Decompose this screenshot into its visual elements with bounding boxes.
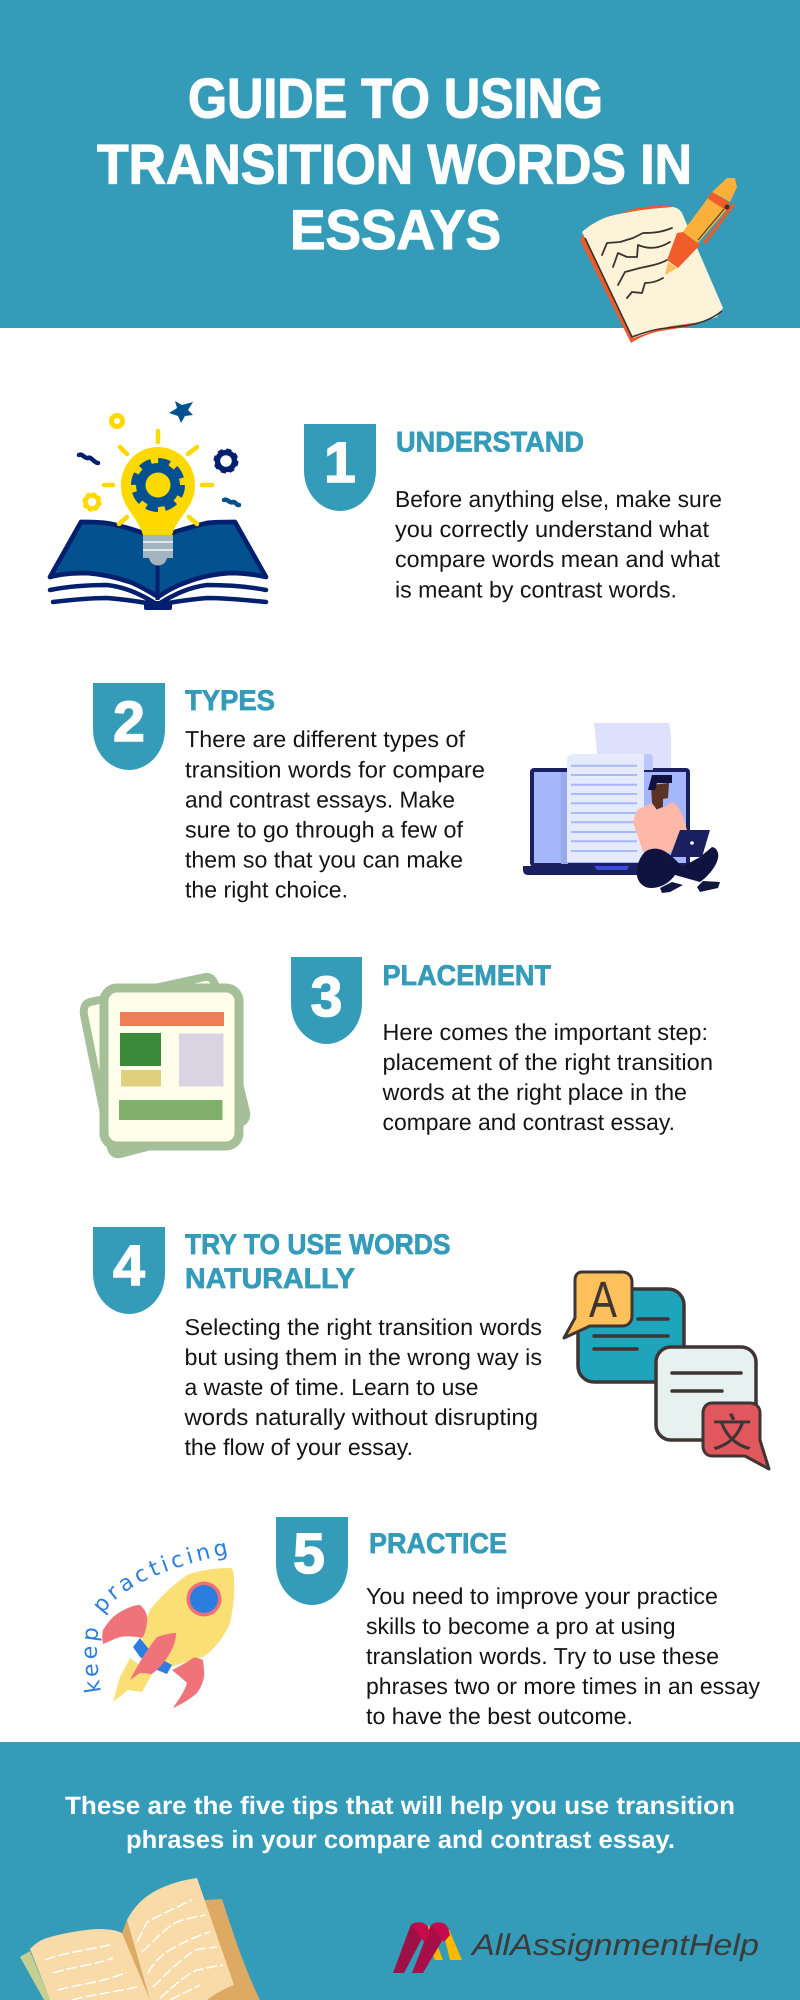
letter A: A [589,1271,617,1328]
step 5 body: You need to improve your practice [366,1583,718,1609]
step 1 body [395,486,722,602]
step 1 badge [304,424,376,511]
step 3 heading: PLACEMENT [382,960,552,992]
step 3 body: Here comes the important step: [382,1019,708,1045]
step 3 body: words at the right place in the [381,1079,687,1105]
step 4 body: Selecting the right transition words [184,1314,542,1340]
step 2 body: and contrast essays. Make [185,786,455,812]
step 1 heading: UNDERSTAND [396,426,584,458]
rocket caption: keep practicing [84,1542,227,1692]
footer text [65,1792,735,1854]
step 4 body: but using them in the wrong way is [184,1344,542,1370]
letter wen: 文 [712,1401,752,1459]
step 4 badge [93,1227,165,1314]
step 3 body: compare and contrast essay. [382,1109,675,1135]
title: TRANSITION WORDS IN [97,132,692,196]
step 2 icon: person with laptop [523,723,720,893]
step 5 badge [276,1517,348,1605]
step 4 heading: TRY TO USE WORDS [185,1229,450,1261]
icon: open book [20,1878,260,2000]
step 3 badge: 3 [311,965,342,1029]
step 4 heading [185,1229,450,1295]
logo: AllAssignmentHelp [393,1922,759,1973]
step 2 body: transition words for compare [185,756,485,782]
title [97,66,692,261]
step 5 badge: 5 [293,1522,325,1586]
step 2 body [185,726,485,902]
step 1 icon: lightbulb and book [50,401,266,610]
step 1 body: Before anything else, make sure [395,486,722,512]
step 2 body: There are different types of [185,726,466,752]
icon: notebook and pen [580,178,737,343]
step 4 body: words naturally without disrupting [183,1404,538,1430]
step 2 body: the right choice. [185,876,348,902]
step 2 body: them so that you can make [185,846,463,872]
step 3 icon: documents [84,977,246,1154]
footer band [0,1742,800,2000]
step 4 badge: 4 [113,1234,145,1298]
footer text: phrases in your compare and contrast essay. [126,1826,675,1854]
step 5 body: phrases two or more times in an essay [366,1673,760,1699]
logo: AllAssignmentHelp: AllAssignmentHelp [470,1929,759,1962]
step 1 badge: 1 [324,431,356,495]
step 2 heading: TYPES [185,685,275,717]
title: GUIDE TO USING [188,66,603,130]
step 3 body: placement of the right transition [382,1049,713,1075]
header band [0,0,800,328]
step 4 icon: translation speech bubbles [564,1271,769,1469]
step 5 body: translation words. Try to use these [366,1643,719,1669]
step 4 heading: NATURALLY [185,1263,355,1295]
step 5 body: skills to become a pro at using [366,1613,676,1639]
step 5 body [366,1583,760,1729]
step 2 body: sure to go through a few of [185,816,464,842]
step 2 badge: 2 [113,690,145,754]
step 5 heading: PRACTICE [369,1528,507,1560]
step 3 badge [291,957,362,1044]
step 3 body [381,1019,713,1135]
step 5 body: to have the best outcome. [366,1703,633,1729]
step 4 body: a waste of time. Learn to use [184,1374,478,1400]
footer text: These are the five tips that will help you use transition [65,1792,735,1820]
step 1 body: you correctly understand what [395,516,710,542]
step 1 body: is meant by contrast words. [395,576,677,602]
step 1 body: compare words mean and what [395,546,721,572]
step 4 body [183,1314,542,1460]
step 2 badge [93,683,165,770]
step 4 body: the flow of your essay. [184,1434,413,1460]
title: ESSAYS [290,198,501,261]
step 5 icon: rocket with caption [84,1542,234,1708]
